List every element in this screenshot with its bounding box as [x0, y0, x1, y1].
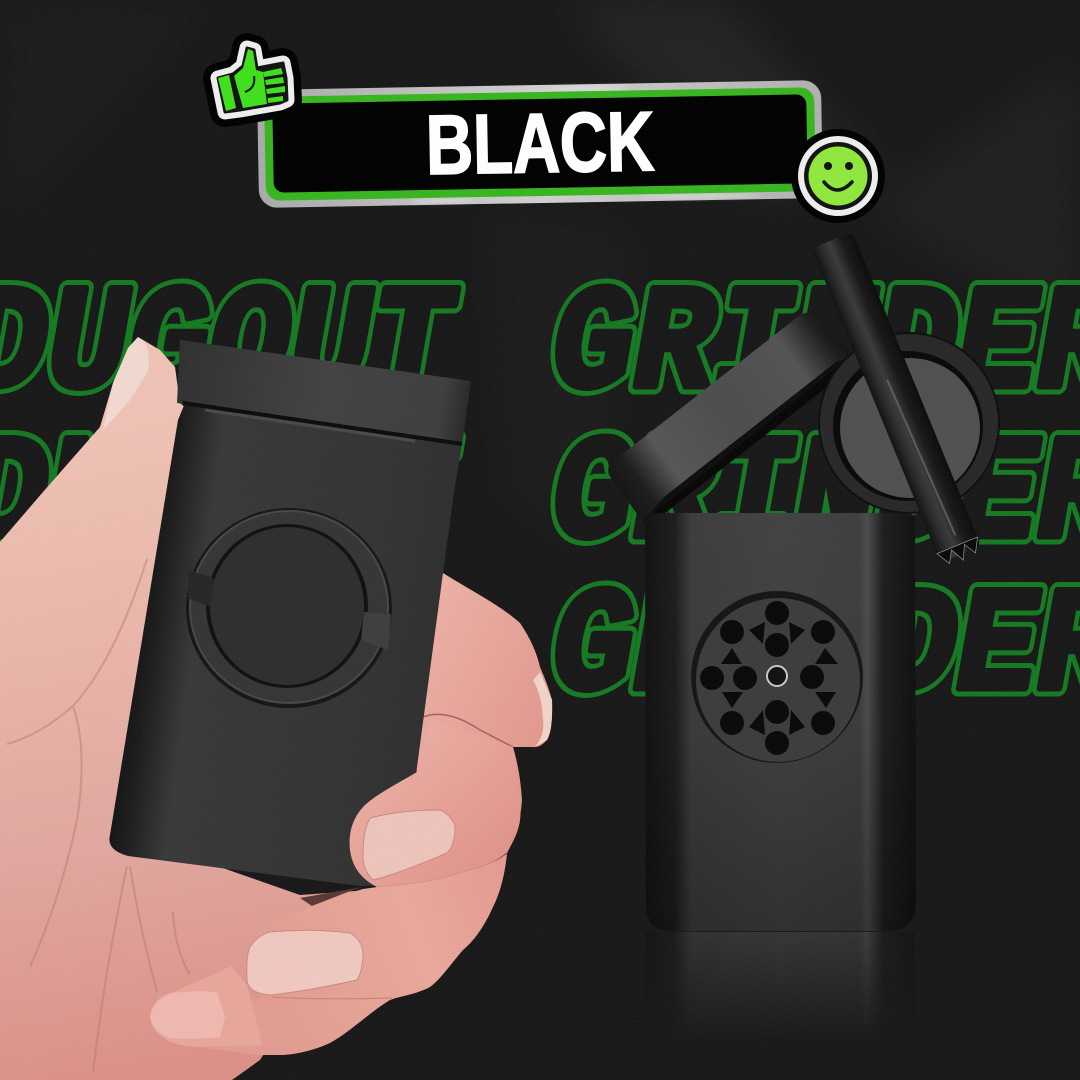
banner black panel [272, 94, 808, 193]
palm creases [7, 559, 190, 1072]
icon: thumbs up sticker [218, 48, 287, 112]
banner title: BLACK [425, 94, 655, 192]
ring finger nail [247, 930, 363, 995]
disc [819, 333, 999, 513]
glove [218, 49, 285, 111]
middle finger [350, 720, 520, 887]
banner [257, 80, 823, 208]
tube [812, 232, 984, 568]
product: open grinder device [608, 232, 999, 931]
background light streaks [0, 0, 1080, 560]
background pattern text: DUGOUT GRINDER [0, 263, 1080, 733]
hand: fingers in front of device [150, 720, 520, 1055]
grinder teeth plate [691, 591, 863, 763]
little finger [150, 966, 262, 1047]
banner green frame [264, 87, 816, 201]
icon: smiley sticker [791, 129, 885, 223]
hand: index finger behind device [400, 573, 552, 870]
banner highlight patches [409, 83, 761, 203]
product reflection [645, 932, 915, 1080]
hand: palm and thumb [0, 337, 370, 1080]
crease between index and middle finger [423, 714, 513, 747]
centre pin [767, 666, 787, 686]
thumb nail [103, 337, 149, 430]
device lid [177, 340, 471, 444]
product: closed dugout device [109, 340, 471, 886]
body [645, 513, 916, 931]
ring on device [186, 508, 392, 708]
ring finger [200, 853, 507, 1055]
lid [608, 313, 850, 521]
gap under device [300, 887, 362, 906]
nail: index finger [533, 672, 552, 747]
banner silver frame [257, 80, 823, 208]
middle finger nail [363, 810, 455, 880]
little finger nail [150, 991, 225, 1039]
